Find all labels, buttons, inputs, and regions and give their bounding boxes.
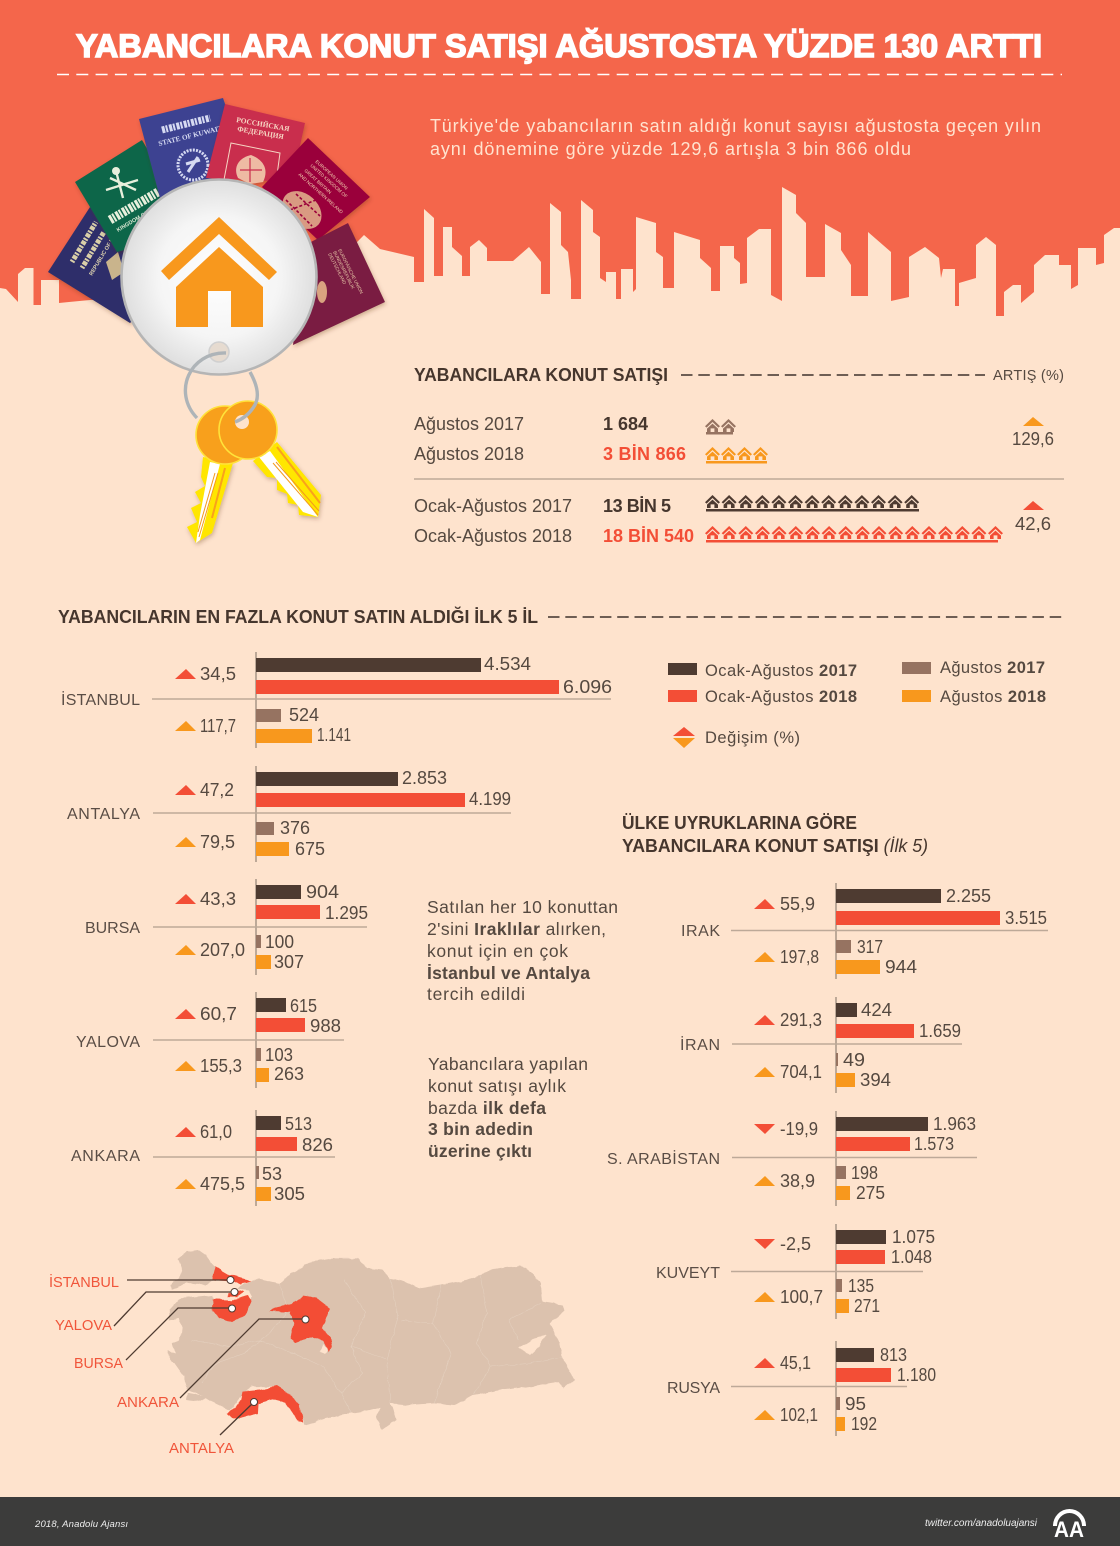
row: Rusya: 192 — [851, 1414, 877, 1434]
key ring front arc — [235, 372, 257, 422]
key: right — [253, 442, 321, 517]
row: Suudi Arabistan: 198 — [851, 1163, 878, 1183]
row: Suudi Arabistan: -19,9 — [780, 1119, 818, 1139]
row: Jan-Aug 2017 — [414, 495, 919, 516]
row: Irak: 197,8 — [780, 947, 819, 967]
row: Kuveyt: 1.048 — [891, 1247, 932, 1267]
row: Yalova: YALOVA — [76, 1034, 140, 1051]
row: Kuveyt — [656, 1224, 935, 1319]
row: Rusya: 813 — [880, 1345, 907, 1365]
province: İstanbul — [212, 1267, 251, 1285]
row: Ankara: 53 — [262, 1164, 282, 1184]
intro text: aynı dönemine göre yüzde 129,6 artışla 3 bin 866 oldu — [430, 139, 911, 159]
text block: Iraqis: Satılan her 10 konuttan — [427, 897, 618, 917]
row: August 2018 — [414, 444, 768, 464]
legend: Ocak-Ağustos 2017 — [705, 662, 857, 680]
row: Yalova: 103 — [265, 1045, 293, 1065]
row: Bursa: 43,3 — [200, 889, 236, 909]
map labels: ANTALYA — [169, 1440, 234, 1457]
passport: Germany: EUROPÄISCHE UNION — [337, 248, 365, 295]
row: İran: 49 — [843, 1050, 865, 1070]
passport: Germany: DEUTSCHLAND — [327, 252, 348, 286]
row: İstanbul: 4.534 — [484, 654, 531, 674]
text block: Iraqis — [427, 897, 618, 1004]
heading dashed rule — [681, 374, 985, 376]
passport: United Kingdom: EUROPEAN UNION — [314, 159, 349, 191]
row: August 2017: Ağustos 2017 — [414, 414, 524, 434]
passport: United Kingdom — [262, 138, 370, 240]
row: Antalya: 2.853 — [402, 768, 447, 788]
row: İran: İRAN — [680, 1035, 720, 1054]
row: Kuveyt: 135 — [848, 1276, 874, 1296]
row: Kuveyt: KUVEYT — [656, 1265, 720, 1282]
map base — [167, 1250, 575, 1430]
chart: top 5 provinces — [61, 652, 612, 1206]
text block: monthly record: Yabancılara yapılan — [428, 1054, 588, 1074]
text block: monthly record — [428, 1054, 588, 1161]
row: Ankara: 61,0 — [200, 1122, 232, 1142]
row: Kuveyt: -2,5 — [780, 1234, 811, 1254]
row: Ankara — [71, 1110, 335, 1206]
row: Irak: IRAK — [681, 923, 720, 940]
row: August 2017 — [414, 414, 736, 434]
text block: monthly record: konut satışı aylık — [428, 1076, 566, 1096]
row: Suudi Arabistan: 275 — [856, 1183, 885, 1203]
legend — [668, 659, 1046, 748]
heading: by nationality — [622, 813, 928, 856]
heading: YABANCILARA KONUT SATIŞI — [414, 365, 668, 385]
province: Bursa — [212, 1295, 251, 1323]
title underline — [57, 74, 1062, 76]
row: Kuveyt: 1.075 — [892, 1227, 935, 1247]
key bows — [196, 401, 277, 464]
intro text: Türkiye'de yabancıların satın aldığı konut sayısı ağustosta geçen yılın — [430, 116, 1041, 136]
row: Bursa: 1.295 — [325, 903, 368, 923]
row: Bursa: 904 — [306, 882, 339, 902]
key tag hole — [209, 342, 229, 362]
passport: United Kingdom: GREAT BRITAIN — [303, 168, 332, 195]
legend: Ocak-Ağustos 2018 — [705, 688, 857, 706]
row: İran: 291,3 — [780, 1010, 822, 1030]
row: İran — [680, 997, 962, 1093]
icon: house — [161, 217, 277, 327]
row: İstanbul: 524 — [289, 705, 319, 725]
heading: by nationality: YABANCILARA KONUT SATIŞI (İlk 5) — [622, 836, 928, 856]
row: Antalya: 47,2 — [200, 780, 234, 800]
row: İstanbul: 6.096 — [563, 677, 612, 697]
row: Yalova: 988 — [310, 1016, 341, 1036]
province: Antalya — [228, 1386, 303, 1423]
row: İstanbul: 1.141 — [317, 725, 351, 745]
passport: navy — [48, 207, 190, 323]
row: Suudi Arabistan: 1.573 — [914, 1134, 954, 1154]
row: İstanbul: İSTANBUL — [61, 690, 140, 709]
row: Rusya — [667, 1341, 936, 1436]
heading rule — [548, 616, 1064, 618]
row: İstanbul: 34,5 — [200, 664, 236, 684]
text block: monthly record: üzerine çıktı — [428, 1141, 532, 1161]
passport: Germany: BUNDESREPUBLIK — [332, 250, 356, 291]
footer — [0, 1497, 1120, 1546]
text block: monthly record: bazda ilk defa — [428, 1098, 546, 1118]
row: İran: 704,1 — [780, 1062, 822, 1082]
row: Bursa: 307 — [274, 952, 304, 972]
row: Irak — [681, 883, 1048, 979]
row: Bursa: 207,0 — [200, 940, 245, 960]
row: Irak: 3.515 — [1005, 908, 1047, 928]
row: Rusya: 1.180 — [897, 1365, 936, 1385]
row: Irak: 944 — [885, 957, 917, 977]
chart: nationalities — [607, 883, 1048, 1436]
passport: Russia: ФЕДЕРАЦИЯ — [237, 124, 285, 141]
row: Irak: 317 — [857, 937, 883, 957]
row: İstanbul — [61, 652, 612, 748]
row: August 2018: 3 BİN 866 — [603, 444, 686, 464]
row: Antalya: ANTALYA — [67, 806, 140, 823]
header: orange skyline band — [0, 0, 1120, 316]
passport: Russia — [206, 104, 305, 190]
row: İstanbul: 117,7 — [200, 716, 236, 736]
row: Jan-Aug 2017: 13 BİN 5 — [603, 496, 671, 516]
legend: Ağustos 2018 — [940, 688, 1046, 706]
passport: United Kingdom: AND NORTHERN IRELAND — [297, 172, 344, 215]
row: Ankara: 305 — [274, 1184, 305, 1204]
legend: Ağustos 2017 — [940, 659, 1045, 677]
map labels: İSTANBUL — [49, 1273, 119, 1291]
map labels: ANKARA — [117, 1394, 179, 1411]
twitter handle: twitter.com/anadoluajansi — [925, 1518, 1038, 1529]
row: Yalova — [76, 992, 344, 1088]
row: Kuveyt: 100,7 — [780, 1287, 823, 1307]
row: August 2017: 1 684 — [603, 414, 648, 434]
change: August: 129,6 — [1012, 429, 1054, 449]
intro text — [430, 116, 1041, 159]
passport: Kuwait — [139, 98, 246, 198]
row: Jan-Aug 2018: Ocak-Ağustos 2018 — [414, 526, 572, 546]
map labels: YALOVA — [55, 1317, 112, 1334]
key: left — [187, 457, 233, 543]
panel: foreign housing sales summary — [414, 365, 1064, 546]
legend: Değişim (%) — [705, 729, 800, 747]
key tag disc — [122, 180, 316, 374]
row: Antalya: 4.199 — [469, 789, 511, 809]
map labels: BURSA — [74, 1355, 123, 1372]
row: Antalya — [67, 766, 511, 862]
change: Jan-Aug: 42,6 — [1015, 514, 1051, 534]
row: Irak: 55,9 — [780, 894, 815, 914]
map labels — [49, 1273, 234, 1457]
text block: Iraqis: İstanbul ve Antalya — [427, 963, 590, 983]
row: Antalya: 376 — [280, 818, 310, 838]
passport: green — [75, 140, 195, 252]
map markers — [227, 1276, 309, 1406]
heading: by nationality: ÜLKE UYRUKLARINA GÖRE — [622, 813, 857, 833]
row: Bursa: 100 — [265, 932, 294, 952]
passport: Germany — [293, 223, 385, 345]
text block: Iraqis: 2'sini Iraklılar alırken, — [427, 919, 606, 939]
row: Rusya: 45,1 — [780, 1353, 811, 1373]
row: Suudi Arabistan: 38,9 — [780, 1171, 815, 1191]
key ring back arc — [185, 353, 226, 418]
row: Yalova: 263 — [274, 1064, 304, 1084]
map of Turkey — [49, 1250, 575, 1457]
title: YABANCILARA KONUT SATIŞI AĞUSTOSTA YÜZDE 130 ARTTI — [76, 28, 1042, 64]
row: Suudi Arabistan — [607, 1111, 977, 1206]
row: Suudi Arabistan: S. ARABİSTAN — [607, 1149, 720, 1168]
row: Yalova: 615 — [290, 996, 317, 1016]
map callouts — [114, 1280, 305, 1435]
row: August 2018: Ağustos 2018 — [414, 444, 524, 464]
row: Jan-Aug 2018: 18 BİN 540 — [603, 526, 694, 546]
row: İran: 1.659 — [919, 1021, 961, 1041]
copyright: 2018, Anadolu Ajansı — [34, 1519, 128, 1530]
province: Yalova — [228, 1290, 244, 1297]
heading: top 5 provinces: YABANCILARIN EN FAZLA KONUT SATIN ALDIĞI İLK 5 İL — [58, 606, 538, 627]
row: İran: 394 — [860, 1070, 891, 1090]
row: Ankara: 513 — [285, 1114, 312, 1134]
row: Jan-Aug 2018 — [414, 526, 1003, 546]
text block: monthly record: 3 bin adedin — [428, 1119, 533, 1139]
row: Kuveyt: 271 — [854, 1296, 880, 1316]
text block: Iraqis: konut için en çok — [427, 941, 568, 961]
row: Yalova: 60,7 — [200, 1004, 237, 1024]
row: İran: 424 — [861, 1000, 892, 1020]
province: Ankara — [269, 1296, 333, 1352]
row: Rusya: 95 — [845, 1394, 866, 1414]
passport: Kuwait: STATE OF KUWAIT — [158, 124, 223, 148]
illustration: passports and key ring — [48, 98, 385, 543]
row: Ankara: 475,5 — [200, 1174, 245, 1194]
row: Yalova: 155,3 — [200, 1056, 242, 1076]
logo: Anadolu Ajansı: AA — [1054, 1517, 1084, 1542]
row: Antalya: 675 — [295, 839, 325, 859]
row: Irak: 2.255 — [946, 886, 991, 906]
row: Bursa — [85, 879, 368, 975]
row: Suudi Arabistan: 1.963 — [933, 1114, 976, 1134]
row: Antalya: 79,5 — [200, 832, 235, 852]
row: Ankara: 826 — [302, 1135, 333, 1155]
passport: United Kingdom: UNITED KINGDOM OF — [309, 163, 348, 199]
change: Jan-Aug — [1015, 501, 1051, 534]
row: Ankara: ANKARA — [71, 1148, 140, 1165]
passport: green: KINGDOM OF — [116, 210, 150, 234]
text block: Iraqis: tercih edildi — [427, 984, 525, 1004]
column label: ARTIŞ (%) — [993, 368, 1064, 384]
passport: navy: REPUBLIC OF IRAQ — [89, 228, 121, 277]
row: Rusya: 102,1 — [780, 1405, 818, 1425]
row: Rusya: RUSYA — [667, 1380, 720, 1397]
row: Bursa: BURSA — [85, 920, 140, 937]
row: Jan-Aug 2017: Ocak-Ağustos 2017 — [414, 496, 572, 516]
change: August — [1012, 417, 1054, 449]
passport: Russia: РОССИЙСКАЯ — [236, 115, 291, 133]
